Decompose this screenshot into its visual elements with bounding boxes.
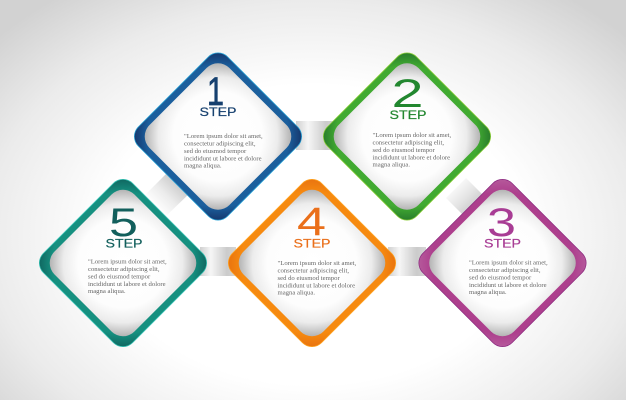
connector: step 4 to step 3 <box>388 247 426 276</box>
connector: step 5 to step 4 <box>200 247 236 276</box>
body text: consectetur adipiscing elit, <box>184 140 256 148</box>
body text: consectetur adipiscing elit, <box>88 266 160 273</box>
numeral 1: 1 <box>207 70 224 114</box>
numeral 5: 5 <box>109 201 138 245</box>
body text: magna aliqua. <box>372 162 410 168</box>
step label: STEP <box>200 107 237 119</box>
body text: incididunt ut labore et dolore <box>184 155 262 162</box>
body text: incididunt ut labore et dolore <box>372 154 450 161</box>
body text: "Lorem ipsum dolor sit amet, <box>88 258 167 266</box>
panel: step 4 <box>222 173 402 353</box>
body text: magna aliqua. <box>469 289 507 296</box>
panel: step 3 <box>413 173 592 353</box>
body text: sed do eiusmod tempor <box>372 147 435 154</box>
body text: consectetur adipiscing elit, <box>469 267 541 274</box>
body text: magna aliqua. <box>278 290 315 296</box>
body text: consectetur adipiscing elit, <box>372 140 444 146</box>
body text: "Lorem ipsum dolor sit amet, <box>469 260 548 266</box>
body text: "Lorem ipsum dolor sit amet, <box>184 133 263 140</box>
body text: "Lorem ipsum dolor sit amet, <box>278 260 357 267</box>
connector: step 2 to step 3 <box>446 178 490 222</box>
body text: consectetur adipiscing elit, <box>278 268 349 274</box>
numeral 3: 3 <box>487 201 516 245</box>
body text: "Lorem ipsum dolor sit amet, <box>372 132 452 139</box>
step label: STEP <box>390 110 427 122</box>
body text: sed do eiusmod tempor <box>278 275 340 282</box>
step label: STEP <box>484 238 521 250</box>
panel: step 2 <box>317 47 497 226</box>
body text: incididunt ut labore et dolore <box>278 282 355 289</box>
step label: STEP <box>106 238 143 250</box>
body text: incididunt ut labore et dolore <box>88 281 166 288</box>
panel: step 5 <box>33 173 213 353</box>
body text: sed do eiusmod tempor <box>469 274 532 282</box>
body text: sed do eiusmod tempor <box>184 148 247 155</box>
step label: STEP <box>294 238 331 250</box>
body text: sed do eiusmod tempor <box>88 274 151 280</box>
body text: magna aliqua. <box>88 288 126 295</box>
body text: incididunt ut labore et dolore <box>469 282 547 289</box>
body text: magna aliqua. <box>184 162 222 170</box>
connector: step 1 to step 2 <box>296 121 336 150</box>
panel: step 1 <box>128 47 308 226</box>
numeral 2: 2 <box>392 72 424 116</box>
connector: step 5 to step 1 <box>142 168 193 219</box>
numeral 4: 4 <box>297 200 326 244</box>
